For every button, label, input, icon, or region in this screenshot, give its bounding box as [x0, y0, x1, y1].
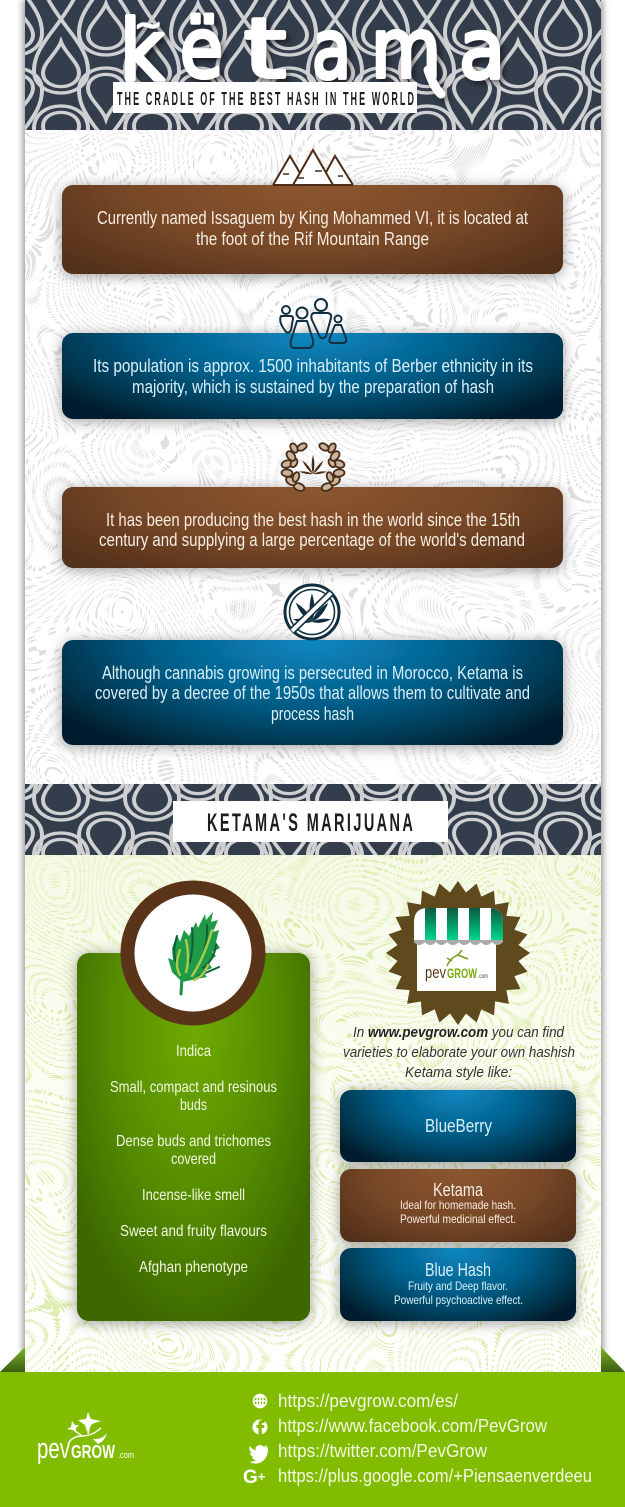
text block: find varieties: Ketama style like: [405, 1065, 512, 1081]
panel: strain characteristics: Small, compact and resinous [110, 1079, 277, 1096]
footer logo: GROW [71, 1442, 115, 1462]
panel: Blue Hash: Powerful psychoactive effect. [394, 1293, 523, 1307]
title: Ketama: k [120, 2, 164, 100]
icon: facebook [252, 1420, 268, 1434]
icon: shop badge: GROW [447, 965, 478, 981]
title: Ketama: a [312, 3, 351, 98]
panel: Ketama strain: Ketama [433, 1180, 484, 1200]
panel: population [62, 333, 563, 419]
text block: find varieties [343, 1025, 575, 1081]
panel: strain characteristics: Sweet and fruity flavours [120, 1223, 267, 1240]
footer links [243, 1391, 592, 1488]
white contour section background [25, 130, 601, 784]
footer fold triangles [0, 1347, 625, 1372]
title: Ketama: m [371, 2, 441, 97]
title: Ketama: ~ [134, 5, 162, 45]
panel: legal status: Although cannabis growing is persecuted in Morocco, Ketama is [102, 663, 523, 683]
icon: mountains [273, 150, 353, 185]
panel: strain characteristics: Incense-like smell [142, 1187, 245, 1204]
footer logo [37, 1412, 134, 1465]
panel: Ketama strain [340, 1169, 576, 1242]
icon: google plus: G [243, 1467, 258, 1488]
link: google plus: https://plus.google.com/+Piensaenverdeeu [278, 1466, 592, 1486]
panel: Blue Hash: Blue Hash [425, 1260, 491, 1280]
panel: BlueBerry [340, 1090, 576, 1162]
link: twitter: https://twitter.com/PevGrow [278, 1441, 488, 1461]
panel: location: Currently named Issaguem by King Mohammed VI, it is located at [97, 208, 528, 228]
panel: Ketama strain: Ideal for homemade hash. [400, 1198, 516, 1212]
panel: best hash: It has been producing the best hash in the world since the 15th [106, 510, 520, 530]
link: facebook: https://www.facebook.com/PevGrow [278, 1416, 548, 1436]
icon: people [280, 299, 346, 348]
header patterned band [25, 0, 601, 130]
icon: prohibited cannabis [285, 585, 339, 639]
panel: strain characteristics: Afghan phenotype [139, 1259, 248, 1276]
icon: google plus: + [258, 1469, 266, 1484]
icon: twitter [249, 1445, 268, 1464]
panel: legal status [62, 640, 563, 745]
icon: shop badge: .com [478, 974, 488, 980]
text block: find varieties: varieties to elaborate your own hashish [343, 1045, 575, 1061]
panel: Blue Hash [340, 1248, 576, 1321]
panel: population: Its population is approx. 1500 inhabitants of Berber ethnicity in its [93, 356, 533, 376]
title: Ketama [120, 2, 505, 100]
panel: strain characteristics [77, 953, 310, 1321]
panel: Blue Hash: Fruity and Deep flavor. [408, 1279, 508, 1293]
panel: strain characteristics: Indica [176, 1043, 211, 1060]
title: Ketama: t [244, 2, 286, 97]
panel: location: the foot of the Rif Mountain Range [196, 229, 429, 249]
panel: legal status: covered by a decree of the 1950s that allows them to cultivate and [95, 683, 530, 703]
panel: legal status: process hash [271, 704, 354, 724]
link: website: https://pevgrow.com/es/ [278, 1391, 458, 1411]
panel: best hash [62, 487, 563, 568]
footer logo: pev [37, 1433, 70, 1465]
footer logo: .com [118, 1450, 134, 1460]
icon: cannabis bud in ring [128, 888, 258, 1018]
text block: find varieties: In www.pevgrow.com you can find [353, 1025, 565, 1041]
panel: BlueBerry: BlueBerry [425, 1116, 492, 1136]
panel: strain characteristics: Dense buds and trichomes [116, 1133, 271, 1150]
panel: Ketama strain: Powerful medicinal effect. [400, 1212, 516, 1226]
green contour section background [25, 855, 601, 1372]
section heading: Ketama's Marijuana: KETAMA'S MARIJUANA [207, 810, 413, 837]
panel: population: majority, which is sustained by the preparation of hash [132, 377, 494, 397]
panel: location [62, 185, 563, 274]
panel: strain characteristics: covered [171, 1151, 216, 1168]
icon: laurel wreath with leaf [281, 442, 345, 492]
footer bar [0, 1372, 625, 1507]
panel: strain characteristics: buds [180, 1097, 207, 1114]
panel: best hash: century and supplying a large percentage of the world's demand [99, 530, 525, 550]
section band: pattern [25, 784, 601, 855]
icon: globe [254, 1394, 266, 1408]
title: Ketama: ë [180, 2, 223, 97]
icon: shop badge: pev [425, 963, 446, 982]
title: Ketama: a [459, 3, 505, 98]
subtitle banner [113, 82, 417, 113]
icon: shop badge [386, 881, 530, 1025]
subtitle banner: THE CRADLE OF THE BEST HASH IN THE WORLD [117, 90, 414, 110]
section heading: Ketama's Marijuana [173, 801, 448, 842]
